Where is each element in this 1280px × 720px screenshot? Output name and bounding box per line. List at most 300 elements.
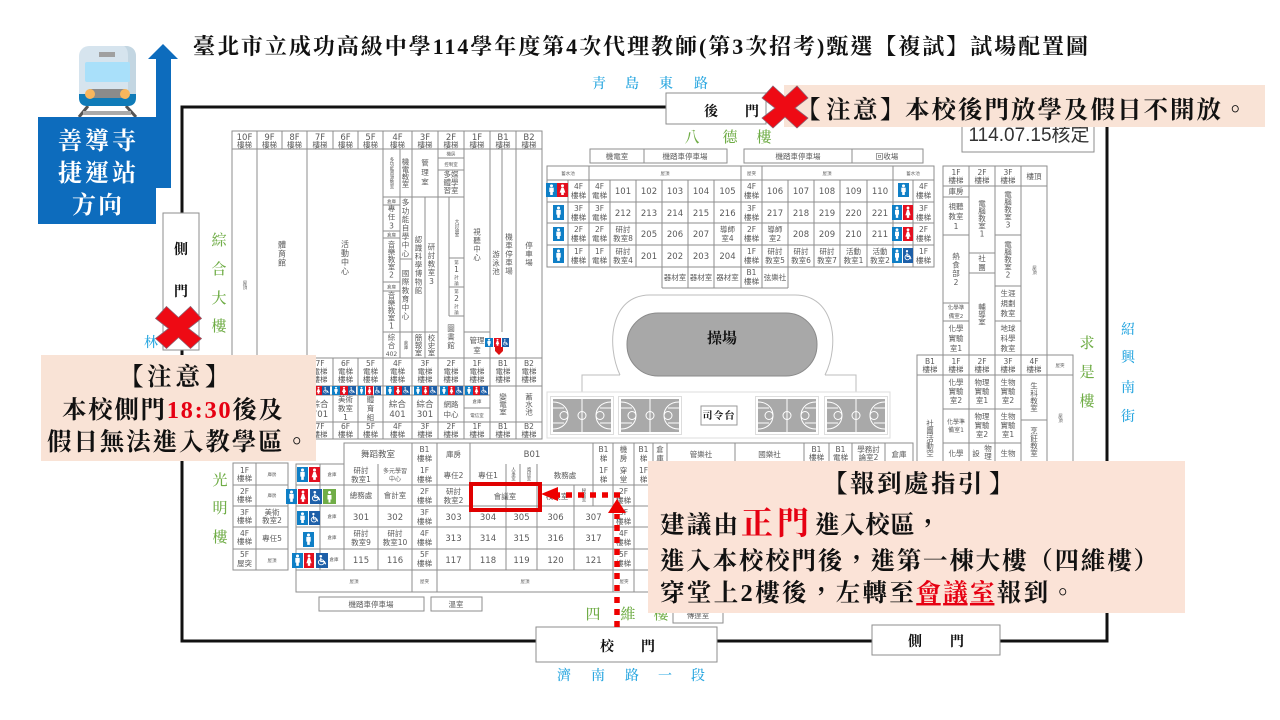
building: 右上棟: 教室 bbox=[948, 211, 964, 221]
building: 八德樓: 教室2 bbox=[870, 255, 890, 265]
building: 四維樓 main block: 專任2 bbox=[444, 470, 464, 480]
gate: west side gate: 門 bbox=[174, 284, 188, 300]
building: 四維樓 main block: 國樂社 bbox=[758, 449, 781, 459]
building: 求是樓: 4F bbox=[1029, 357, 1039, 366]
building: 右上棟: 電腦教室2 bbox=[1003, 240, 1012, 280]
building label: 求是樓 bbox=[1079, 335, 1095, 410]
building: left wing top (綜合大樓): B1 bbox=[497, 133, 509, 143]
building: left wing bottom: 6F bbox=[341, 359, 350, 368]
building: left wing bottom: 樓梯 bbox=[470, 374, 485, 384]
gate: back gate bbox=[666, 93, 766, 124]
road label: 紹興南街: 紹 bbox=[1121, 322, 1135, 338]
building: 八德樓 annexes: 機電室 bbox=[606, 151, 629, 161]
building: 四維樓 main block: 1F bbox=[599, 466, 608, 475]
building label: 光明樓 bbox=[212, 471, 228, 546]
building: 四維樓 main block: 梯 bbox=[600, 474, 608, 484]
building: left wing bottom: 樓梯 bbox=[312, 429, 328, 439]
building: 四維樓 main block: 庫 bbox=[656, 453, 664, 463]
building: 八德樓: 201 bbox=[641, 252, 657, 262]
gate: west side gate: 側 bbox=[174, 241, 188, 258]
building: 八德樓: 3F bbox=[747, 204, 756, 213]
callout: check-in guide: 報到處指引 bbox=[850, 470, 985, 498]
building: 八德樓: 213 bbox=[641, 209, 657, 219]
building: left wing top (綜合大樓): 402 bbox=[386, 351, 397, 358]
building: 右上棟: 電腦教室1 bbox=[977, 199, 986, 238]
road label: 濟南路一段: 濟 bbox=[557, 667, 571, 684]
building: 八德樓: 屋突 bbox=[747, 170, 756, 177]
building: 八德樓: 研討 bbox=[820, 246, 835, 256]
building: 八德樓 annexes: 機踏車停車場 bbox=[662, 151, 708, 161]
building: 八德樓: 教室1 bbox=[844, 255, 864, 265]
building: 四維樓 main block: 倉庫 bbox=[892, 449, 907, 459]
building: 求是樓: 物 bbox=[984, 443, 992, 453]
building: 光明樓 wing: 樓梯 bbox=[237, 494, 252, 504]
building: 求是樓: 室1 bbox=[1002, 429, 1014, 439]
building: left wing bottom: 樓梯 bbox=[496, 429, 511, 439]
building: left wing top (綜合大樓): 9F bbox=[264, 133, 275, 143]
callout: side gate notice: 】 bbox=[205, 363, 230, 391]
building: left wing top (綜合大樓): 圖書館 bbox=[446, 324, 456, 350]
building: 右上棟: 實驗 bbox=[948, 333, 964, 343]
icon: back gate closed cross bbox=[762, 86, 808, 128]
building: left wing bottom: 電梯 bbox=[470, 366, 485, 376]
building: 八德樓: 1F bbox=[595, 247, 604, 256]
building label: 光明樓: 明 bbox=[212, 500, 228, 517]
building: 求是樓: 屋頂 bbox=[1058, 413, 1063, 424]
building: left wing top (綜合大樓): 多媒 bbox=[444, 169, 459, 179]
building: 四維樓 main block: 人事室 bbox=[510, 467, 516, 481]
building: 求是樓: 社團活動空 bbox=[925, 418, 934, 457]
building: 八德樓: 導師 bbox=[768, 224, 783, 234]
building: left wing top (綜合大樓): 樓梯 bbox=[470, 140, 485, 150]
building: 八德樓 bbox=[546, 166, 934, 288]
road label: 紹興南街: 興 bbox=[1121, 350, 1137, 366]
building: 八德樓: 樓梯 bbox=[571, 212, 586, 222]
building label: 八德樓: 樓 bbox=[756, 128, 772, 146]
building: 四維樓 main block: 會議室 bbox=[494, 491, 517, 501]
building: 八德樓: 204 bbox=[719, 252, 736, 262]
building: 光明樓 wing: 美術 bbox=[264, 507, 280, 517]
building: 光明樓 wing: 教室2 bbox=[262, 515, 282, 525]
building: 四維樓 main block: 2F bbox=[619, 487, 628, 496]
icon: restrooms west end bbox=[286, 467, 336, 568]
building: 八德樓: 樓梯 bbox=[571, 190, 586, 200]
gate: main gate: 校 bbox=[600, 638, 615, 655]
building: 右上棟: 團 bbox=[978, 263, 986, 272]
building: left wing top (綜合大樓): 討 bbox=[454, 303, 459, 310]
building: left wing bottom: 樓梯 bbox=[470, 429, 485, 439]
building: left wing bottom: 電梯 bbox=[418, 366, 433, 376]
building: 八德樓 annexes: 機踏車停車場 bbox=[776, 151, 821, 161]
building: left wing bottom: 5F bbox=[366, 359, 375, 368]
building: left wing bottom: 樓梯 bbox=[390, 429, 405, 439]
building: 八德樓: 器材室 bbox=[664, 272, 687, 282]
building: 八德樓: 樓梯 bbox=[744, 233, 759, 243]
building: left wing top (綜合大樓): 10F bbox=[237, 133, 252, 143]
building: 光明樓 wing: 2F bbox=[240, 487, 249, 496]
building: left wing top (綜合大樓): 習室 bbox=[444, 185, 459, 195]
building: 四維樓 main block: 118 bbox=[480, 556, 496, 566]
road label: 濟南路一段: 一 bbox=[658, 669, 672, 684]
building: 右上棟: 室1 bbox=[950, 343, 962, 353]
building: 右上棟: 樓梯 bbox=[974, 175, 990, 185]
greenhouse box bbox=[431, 597, 482, 611]
building: 四維樓 main block: 研討 bbox=[446, 486, 461, 496]
callout: check-in guide: 】 bbox=[989, 470, 1014, 498]
building: left wing top (綜合大樓): 5F bbox=[365, 133, 376, 143]
building: 八德樓: 屋頂 bbox=[660, 171, 670, 177]
building: 右上棟: 1 bbox=[954, 222, 959, 231]
building: left wing bottom: 2F bbox=[446, 359, 456, 368]
building: 八德樓: 電梯 bbox=[592, 190, 607, 200]
building: 八德樓: 216 bbox=[719, 209, 736, 219]
building: 八德樓: 研討 bbox=[616, 246, 631, 256]
campus boundary bbox=[182, 107, 1107, 641]
building: 八德樓: 研討 bbox=[616, 224, 631, 234]
building: 四維樓 main block: 樓梯 bbox=[616, 558, 631, 568]
building: left wing bottom: 5F bbox=[366, 422, 375, 431]
callout: back gate notice: 【 bbox=[796, 96, 820, 124]
building: left wing bottom: 電梯 bbox=[444, 366, 459, 376]
building: 四維樓 main block: 舞蹈教室 bbox=[361, 449, 395, 460]
building: 光明樓 wing: 4F bbox=[240, 529, 249, 538]
building: 光明樓 wing: 屋頂 bbox=[268, 558, 277, 564]
building: 八德樓: 215 bbox=[693, 209, 709, 219]
building: 四維樓 main block: 教室9 bbox=[351, 537, 371, 547]
building: 八德樓: 室4 bbox=[721, 233, 734, 243]
building: left wing bottom: 樓梯 bbox=[338, 429, 353, 439]
callout: check-in guide: 【 bbox=[823, 470, 848, 498]
building: left wing top (綜合大樓): 校史室 bbox=[427, 332, 436, 356]
building: left wing top (綜合大樓): 4F bbox=[392, 133, 403, 143]
building: 求是樓: B1 bbox=[925, 357, 935, 366]
road label: 紹興南街: 南 bbox=[1121, 379, 1135, 396]
building: 八德樓: 研討 bbox=[768, 246, 783, 256]
building: 求是樓: 生物 bbox=[1000, 448, 1016, 458]
building: 右上棟: 樓梯 bbox=[948, 175, 964, 185]
building: 四維樓 main block: 117 bbox=[445, 556, 462, 566]
building: 四維樓 main block: 317 bbox=[585, 534, 602, 544]
building: left wing top (綜合大樓): 管理室 bbox=[420, 157, 430, 187]
building: 四維樓 main block: 4F bbox=[619, 529, 628, 538]
building label: 八德樓 bbox=[684, 128, 772, 146]
building: left wing top (綜合大樓): 樓梯 bbox=[287, 140, 302, 150]
building: 四維樓 main block: B1 bbox=[599, 445, 609, 454]
building: 八德樓: 211 bbox=[872, 230, 888, 240]
building: left wing bottom: 變電室 bbox=[498, 391, 508, 415]
building: 四維樓 main block: 5F bbox=[619, 550, 628, 559]
building label: 綜合大樓: 樓 bbox=[211, 317, 227, 335]
building: left wing top (綜合大樓): 體育館 bbox=[278, 240, 286, 268]
panel: MRT direction: 捷運站 bbox=[58, 160, 136, 187]
building: 八德樓: 110 bbox=[872, 187, 888, 197]
building: left wing bottom: 電梯 bbox=[312, 366, 328, 376]
building: left wing bottom: 體 bbox=[367, 394, 375, 404]
building: left wing bottom: 綜合 bbox=[311, 399, 329, 410]
building: 八德樓: 214 bbox=[667, 209, 683, 219]
building: left wing bottom: 1F bbox=[472, 422, 482, 431]
building: 光明樓 wing: 專任5 bbox=[262, 533, 282, 543]
building: 四維樓 main block: 多元學習 bbox=[383, 467, 407, 475]
building: 四維樓 main block: 樓梯 bbox=[417, 537, 432, 547]
building: left wing top (綜合大樓): 機房 bbox=[446, 150, 456, 158]
building: left wing bottom: 樓梯 bbox=[418, 374, 433, 384]
building: 求是樓: 烹飪教室 bbox=[1029, 426, 1038, 457]
building: left wing bottom: 電梯 bbox=[522, 366, 537, 376]
building: 四維樓 main block: 304 bbox=[480, 513, 496, 523]
building: 八德樓: 212 bbox=[615, 209, 631, 219]
building: 八德樓: 107 bbox=[793, 187, 809, 197]
building: 八德樓: 207 bbox=[693, 230, 709, 240]
building: 四維樓 main block: 樓梯 bbox=[616, 537, 631, 547]
building: left wing bottom: 樓梯 bbox=[444, 374, 459, 384]
building: 八德樓: 221 bbox=[872, 209, 888, 219]
callout: check-in guide: 進入本校校門後，進第一棟大樓（四維樓） bbox=[660, 547, 1158, 575]
building: left wing top (綜合大樓): 樓梯 bbox=[418, 140, 433, 150]
building: left wing bottom: 美術 bbox=[338, 394, 353, 404]
building: 四維樓 main block: 教室10 bbox=[383, 537, 407, 547]
building: 四維樓 main block: 306 bbox=[547, 513, 564, 523]
building: 八德樓: 樓梯 bbox=[744, 255, 759, 265]
building: 右上棟: 規劃 bbox=[1000, 298, 1016, 308]
building: 求是樓: 生物 bbox=[1000, 411, 1016, 421]
building: 右上棟: 庫房 bbox=[948, 186, 964, 196]
building: 八德樓: 104 bbox=[693, 187, 709, 197]
building: 四維樓 main block: 4F bbox=[420, 529, 429, 538]
building: 四維樓 main block: 會計室 bbox=[384, 490, 407, 500]
track and field: 操場 bbox=[707, 329, 737, 347]
callout: back gate notice: 本校後門放學及假日不開放。 bbox=[905, 96, 1250, 124]
building: 四維樓 main block: 樓梯 bbox=[417, 495, 432, 505]
basketball courts bbox=[547, 392, 890, 438]
building: left wing top (綜合大樓): 1 bbox=[454, 265, 459, 274]
building: 右上棟: 地球 bbox=[1000, 323, 1016, 333]
building: left wing bottom: 樓梯 bbox=[496, 374, 511, 384]
building: left wing top (綜合大樓): 樓梯 bbox=[522, 140, 537, 150]
building: left wing top (綜合大樓): 多功能資源教室 bbox=[389, 156, 394, 189]
building: 光明樓 wing: 樓梯 bbox=[237, 515, 252, 525]
building: left wing top (綜合大樓): 認識科學博物館 bbox=[414, 234, 423, 295]
highlight: meeting room bbox=[471, 484, 540, 510]
building: 八德樓: 220 bbox=[845, 209, 862, 219]
building: 四維樓 main block: 303 bbox=[445, 513, 462, 523]
building: 四維樓 main block: B1 bbox=[639, 445, 649, 454]
building: 右上棟: 化學 bbox=[948, 323, 964, 333]
building: left wing bottom: 樓梯 bbox=[363, 429, 378, 439]
building: left wing top (綜合大樓): 研討教室3 bbox=[427, 243, 436, 287]
building: 光明樓 wing: 屋突 bbox=[237, 558, 252, 568]
building: left wing top (綜合大樓): 6F bbox=[340, 133, 351, 143]
building: 四維樓 main block: 120 bbox=[547, 556, 564, 566]
building: 四維樓 main block: 樓梯 bbox=[809, 452, 824, 462]
building: left wing bottom: 樓梯 bbox=[363, 374, 378, 384]
guard room box: 傳達室 bbox=[687, 610, 710, 620]
building: 八德樓: 218 bbox=[793, 209, 809, 219]
building: left wing top (綜合大樓): 倉庫 bbox=[387, 198, 396, 205]
building: 求是樓: 化學準 bbox=[947, 418, 965, 426]
building: 右上棟: 備室2 bbox=[949, 312, 963, 320]
gate: main gate bbox=[536, 627, 717, 662]
building: left wing top (綜合大樓): 屋頂 bbox=[242, 280, 247, 291]
building: 求是樓: 室1 bbox=[976, 395, 988, 405]
building: 八德樓: 2F bbox=[595, 225, 604, 234]
building: left wing bottom: 4F bbox=[393, 359, 402, 368]
building: 八德樓: 4F bbox=[919, 182, 928, 191]
building: 四維樓 main block: 屋突 bbox=[620, 578, 629, 585]
building: 四維樓 main block: 堂 bbox=[620, 474, 628, 484]
building: left wing bottom: 6F bbox=[341, 422, 350, 431]
building: 八德樓: 4F bbox=[747, 182, 756, 191]
building: 右上棟: 生涯 bbox=[1000, 288, 1016, 298]
command platform bbox=[701, 406, 737, 425]
panel: MRT direction bbox=[38, 117, 156, 224]
building: left wing bottom: 電梯 bbox=[338, 366, 353, 376]
building: 四維樓 main block: 315 bbox=[513, 534, 530, 544]
building: left wing top (綜合大樓): 樓梯 bbox=[390, 140, 405, 150]
building: 求是樓: 物理 bbox=[974, 377, 990, 387]
building: 求是樓: 設 bbox=[972, 448, 980, 458]
building: 八德樓: 106 bbox=[767, 187, 783, 197]
building: 求是樓: 2F bbox=[977, 357, 987, 366]
gate: back gate: 門 bbox=[745, 104, 759, 120]
building: 四維樓 main block: 121 bbox=[585, 556, 602, 566]
callout: back gate notice bbox=[784, 85, 1265, 127]
building: 求是樓: 1F bbox=[951, 357, 961, 366]
building: 求是樓: 室2 bbox=[1002, 395, 1014, 405]
road label: 濟南路一段: 南 bbox=[591, 667, 605, 684]
road label: 青島東路: 島 bbox=[625, 75, 639, 92]
building: 四維樓 main block: 樓梯 bbox=[417, 474, 432, 484]
building: 八德樓: 105 bbox=[719, 187, 736, 197]
building label: 求是樓: 求 bbox=[1079, 335, 1095, 352]
building: 求是樓: 實驗 bbox=[974, 386, 990, 396]
building label: 八德樓: 德 bbox=[722, 129, 738, 146]
building: left wing top (綜合大樓): 多功能自學中心 bbox=[401, 197, 410, 258]
building: 八德樓: 4F bbox=[595, 182, 604, 191]
building: left wing bottom: 7F bbox=[315, 359, 325, 368]
building: left wing top (綜合大樓): 控制室 bbox=[444, 161, 458, 168]
date stamp: 114.07.15核定 bbox=[968, 124, 1090, 146]
building: 八德樓: 室2 bbox=[769, 233, 781, 243]
building: 八德樓: 樓梯 bbox=[571, 233, 586, 243]
building: 四維樓 main block: 倉庫 bbox=[328, 471, 337, 478]
arrow: route from main gate to meeting room bbox=[541, 487, 626, 627]
building: 四維樓 main block: 316 bbox=[547, 534, 564, 544]
building: left wing bottom: 樓梯 bbox=[444, 429, 459, 439]
road label: 濟南路一段: 路 bbox=[625, 668, 639, 684]
callout: back gate notice: 注意 bbox=[826, 95, 880, 124]
callout: side gate notice: 【 bbox=[119, 363, 144, 391]
icon: 八德樓 restrooms bbox=[546, 183, 913, 263]
building: 八德樓: 101 bbox=[615, 187, 631, 197]
building: 右上棟: 科學 bbox=[1000, 333, 1016, 343]
building: 求是樓: 室2 bbox=[950, 395, 962, 405]
building: left wing bottom bbox=[307, 358, 542, 439]
building: 四維樓 main block: 倉庫 bbox=[328, 534, 337, 541]
building: 八德樓: 1F bbox=[747, 247, 756, 256]
building: 光明樓 wing: 樓梯 bbox=[237, 536, 252, 546]
building: 四維樓 main block: 教室1 bbox=[351, 474, 371, 484]
building: 八德樓: 活動 bbox=[846, 246, 861, 256]
callout: check-in guide: 正門 bbox=[741, 505, 809, 541]
road label: 青島東路: 青 bbox=[592, 75, 606, 92]
building: 八德樓: B1 bbox=[747, 268, 757, 277]
callout: check-in guide: 穿堂上2樓後，左轉至會議室報到。 bbox=[660, 578, 1075, 607]
building: 八德樓: 教室4 bbox=[613, 255, 633, 265]
building: 八德樓: 209 bbox=[819, 230, 835, 240]
building: left wing bottom: 樓梯 bbox=[522, 429, 537, 439]
building: 八德樓: 103 bbox=[667, 187, 683, 197]
building: left wing top (綜合大樓): 國際教育中心 bbox=[401, 269, 410, 320]
building: 八德樓: 電梯 bbox=[592, 233, 607, 243]
callout: side gate notice: 假日無法進入教學區。 bbox=[47, 428, 309, 456]
building: 求是樓: 屋突 bbox=[1056, 362, 1065, 369]
building: 四維樓 main block: 樓梯 bbox=[417, 516, 432, 526]
building label: 四維樓 bbox=[585, 605, 669, 623]
building: 光明樓 wing: 庫房 bbox=[268, 471, 277, 478]
date stamp bbox=[962, 110, 1094, 152]
building: 八德樓: 教室6 bbox=[791, 255, 811, 265]
building label: 四維樓: 樓 bbox=[653, 605, 669, 623]
building: 八德樓: 導師 bbox=[720, 224, 735, 234]
building: left wing top (綜合大樓): 2 bbox=[454, 294, 459, 303]
building: 四維樓 main block: 119 bbox=[513, 556, 530, 566]
building: 四維樓 main block: 論室2 bbox=[859, 452, 879, 462]
building: left wing top (綜合大樓): 活動中心 bbox=[340, 239, 350, 276]
panel: MRT direction: 善導寺 bbox=[58, 127, 136, 155]
building: left wing top (綜合大樓): 專任3 bbox=[387, 203, 396, 232]
guard room box bbox=[673, 598, 723, 623]
building: 四維樓 main block: 2F bbox=[420, 487, 429, 496]
building: left wing bottom: 倉庫 bbox=[472, 398, 482, 405]
building: 四維樓 main block: 屋突 bbox=[420, 578, 429, 585]
building: 求是樓: 生科教室 bbox=[1029, 381, 1038, 412]
building: 八德樓: 電梯 bbox=[592, 255, 607, 265]
building label: 四維樓: 四 bbox=[585, 606, 601, 623]
gate: back gate: 後 bbox=[704, 103, 719, 120]
building: left wing bottom: 1F bbox=[472, 359, 482, 368]
road label: 濟南路一段 bbox=[557, 667, 705, 684]
icon: train bbox=[79, 46, 136, 117]
building: 八德樓: 教室7 bbox=[817, 255, 837, 265]
road label: 青島東路: 路 bbox=[694, 76, 708, 92]
building: 四維樓 main block: 屋頂 bbox=[520, 579, 530, 585]
building: 求是樓: 實驗 bbox=[1000, 386, 1016, 396]
building: 光明樓 wing bbox=[233, 463, 288, 570]
building: 右上棟: 2F bbox=[977, 168, 987, 177]
building: 八德樓: 樓梯 bbox=[916, 212, 931, 222]
building: 四維樓 main block: B1 bbox=[836, 445, 846, 454]
building: left wing bottom: 樓梯 bbox=[338, 374, 353, 384]
building: 四維樓 main block: 樓梯 bbox=[417, 453, 432, 463]
building: 八德樓: 3F bbox=[919, 204, 928, 213]
building: 右上棟: 電腦教室3 bbox=[1003, 190, 1012, 230]
building: 四維樓 main block: B1 bbox=[812, 445, 822, 454]
building: 光明樓 wing: 1F bbox=[240, 466, 249, 475]
building: left wing bottom: 701 bbox=[312, 410, 328, 420]
building: left wing bottom: 蓄水池 bbox=[524, 391, 534, 415]
callout: check-in guide: 建議由 bbox=[660, 511, 738, 539]
building: 八德樓: 205 bbox=[641, 230, 657, 240]
building: left wing bottom: 2F bbox=[446, 422, 456, 431]
building: 右上棟: 教室 bbox=[1000, 308, 1016, 318]
building: 八德樓: 樓梯 bbox=[916, 190, 931, 200]
gate: south side gate: 門 bbox=[950, 634, 964, 650]
callout: side gate notice: 本校側門18:30後及 bbox=[62, 396, 283, 424]
building: 四維樓 main block: 梯 bbox=[640, 474, 648, 484]
building: 四維樓 main block: 1F bbox=[420, 466, 429, 475]
building: 八德樓: 屋頂 bbox=[822, 171, 832, 177]
